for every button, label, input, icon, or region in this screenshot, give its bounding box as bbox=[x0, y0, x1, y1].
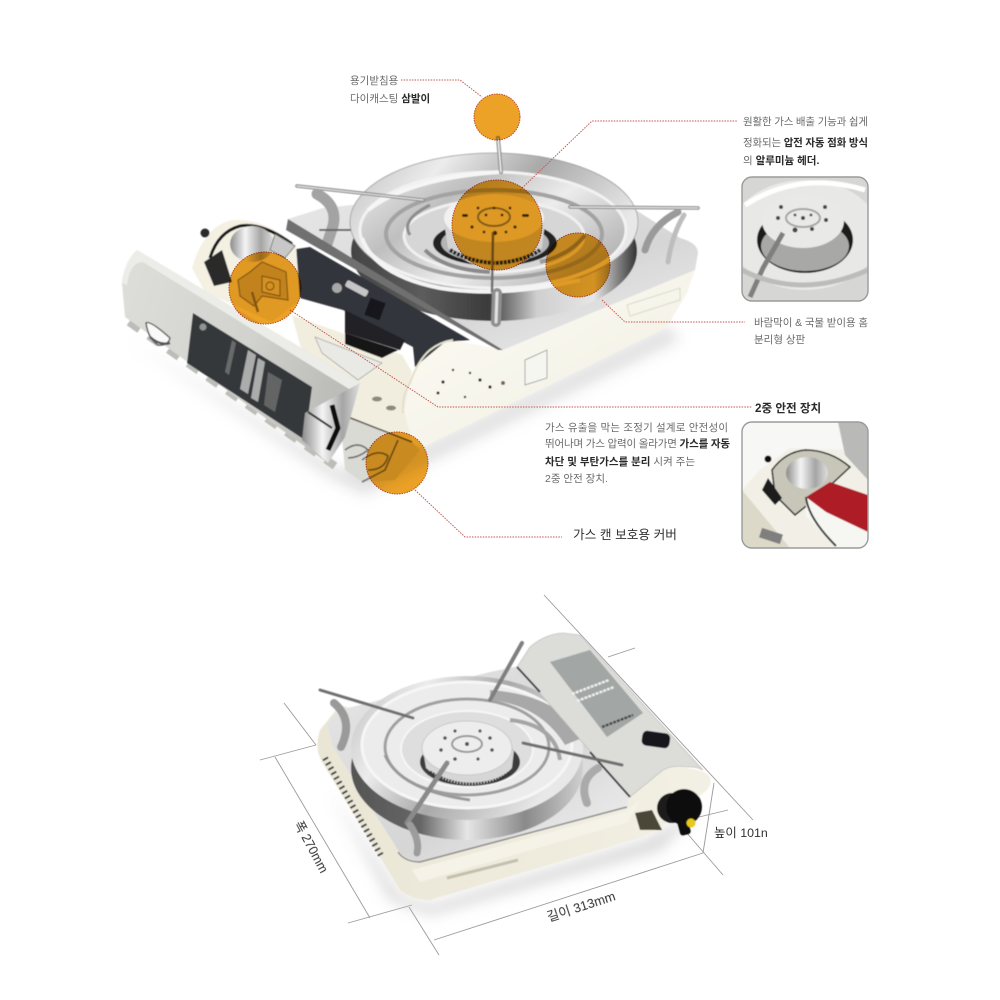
text block: safety description: 가스 유출을 막는 조정기 설계로 안전성이 bbox=[545, 422, 728, 434]
pan bowl bbox=[351, 181, 637, 321]
label: height: 높이 101n bbox=[714, 826, 768, 840]
pan rings bbox=[362, 682, 582, 808]
cover black label bbox=[187, 313, 312, 440]
thumbnail frame: gas can bbox=[742, 422, 868, 548]
chrome cover end bbox=[302, 383, 360, 463]
label text blocks bbox=[200, 324, 282, 412]
label: length: 길이 313mm bbox=[545, 888, 617, 925]
pan rim bbox=[351, 676, 583, 820]
text block: safety description: 뛰어나며 가스 압력이 올라가면 가스를 자동 bbox=[545, 437, 730, 450]
valve block bbox=[204, 250, 232, 286]
callout: trivet bbox=[350, 75, 430, 105]
callout: gas can cover: 가스 캔 보호용 커버 bbox=[573, 528, 677, 542]
cover hinge shadow bbox=[517, 667, 630, 797]
dark hinged panel bbox=[290, 247, 470, 367]
side vents bbox=[325, 758, 382, 857]
regulator body in highlight bbox=[238, 262, 288, 312]
callout: wind-blocking top plate: 바람막이 & 국물 받이용 홈 bbox=[754, 316, 868, 329]
cover slot bbox=[641, 730, 671, 749]
cream stove body bbox=[403, 270, 695, 447]
thumbnail: burner close-up bbox=[742, 178, 868, 300]
cover scallops bbox=[129, 322, 335, 466]
front highlight bbox=[412, 800, 640, 882]
pan bowl bbox=[351, 696, 583, 840]
brand text strip bbox=[447, 860, 518, 878]
cream rim highlight bbox=[403, 340, 453, 413]
dimension lines bbox=[260, 595, 753, 955]
gas knob assembly bbox=[635, 789, 702, 836]
callout: aluminum burner head: 의 알루미늄 헤더. bbox=[743, 154, 819, 167]
text block: safety description: 차단 및 부탄가스를 분리 시켜 주는 bbox=[545, 455, 695, 468]
callout: wind-blocking top plate: 분리형 상판 bbox=[754, 334, 806, 346]
cream interior of gas chamber bbox=[292, 315, 412, 442]
silver gas cover bbox=[517, 633, 703, 797]
label text bbox=[572, 680, 633, 727]
silver dome bbox=[230, 226, 274, 262]
orange highlight circles bbox=[229, 94, 610, 494]
callout: aluminum burner head: 정화되는 압전 자동 점화 방식 bbox=[743, 136, 868, 149]
cover upper band bbox=[122, 250, 360, 392]
callout: wind-blocking top plate bbox=[754, 316, 868, 346]
label: width: 폭 270mm bbox=[291, 819, 331, 875]
bottom stove illustration: assembled view bbox=[317, 633, 711, 915]
plate label on cream bbox=[627, 288, 680, 316]
hinged cover bbox=[122, 250, 360, 463]
cream end holes bbox=[436, 369, 505, 398]
panel mechanism details bbox=[315, 280, 405, 410]
cover finger hole bbox=[146, 323, 170, 345]
heading: dual safety device: 2중 안전 장치 bbox=[755, 402, 821, 415]
pan outer rim bbox=[350, 153, 638, 291]
stainless top plate bbox=[288, 200, 698, 350]
stainless plate bbox=[327, 662, 630, 862]
hinge bevel bbox=[286, 219, 503, 350]
valve bracket bbox=[270, 234, 295, 258]
burner bbox=[433, 194, 557, 268]
callout: aluminum burner head: 원활한 가스 배출 기능과 쉽게 bbox=[743, 115, 868, 128]
left end cap with regulator bbox=[192, 220, 300, 322]
leader lines bbox=[290, 80, 752, 537]
callout: trivet: 다이캐스팅 삼발이 bbox=[350, 92, 430, 105]
thumbnail: gas can close-up bbox=[742, 422, 868, 548]
shadow bbox=[330, 790, 700, 915]
warning sticker bbox=[525, 350, 547, 385]
cream body bbox=[317, 705, 711, 900]
text block: safety description bbox=[545, 422, 730, 485]
top stove illustration: open cover view bbox=[122, 138, 698, 495]
pan rings bbox=[360, 172, 626, 292]
knob stud bbox=[200, 228, 210, 238]
trivet arms bbox=[297, 138, 698, 322]
burner bbox=[420, 721, 520, 786]
text block: safety description: 2중 안전 장치. bbox=[545, 473, 608, 485]
cover label bbox=[550, 650, 643, 737]
ground shadow bbox=[130, 325, 680, 495]
callout: trivet: 용기받침용 bbox=[350, 75, 399, 87]
thumbnail frame: burner bbox=[742, 177, 868, 301]
plate rim edge bbox=[398, 807, 627, 862]
chrome gas-can end and swirl bbox=[342, 417, 420, 482]
callout: aluminum burner head bbox=[743, 115, 868, 167]
trivet arms bbox=[320, 643, 622, 853]
